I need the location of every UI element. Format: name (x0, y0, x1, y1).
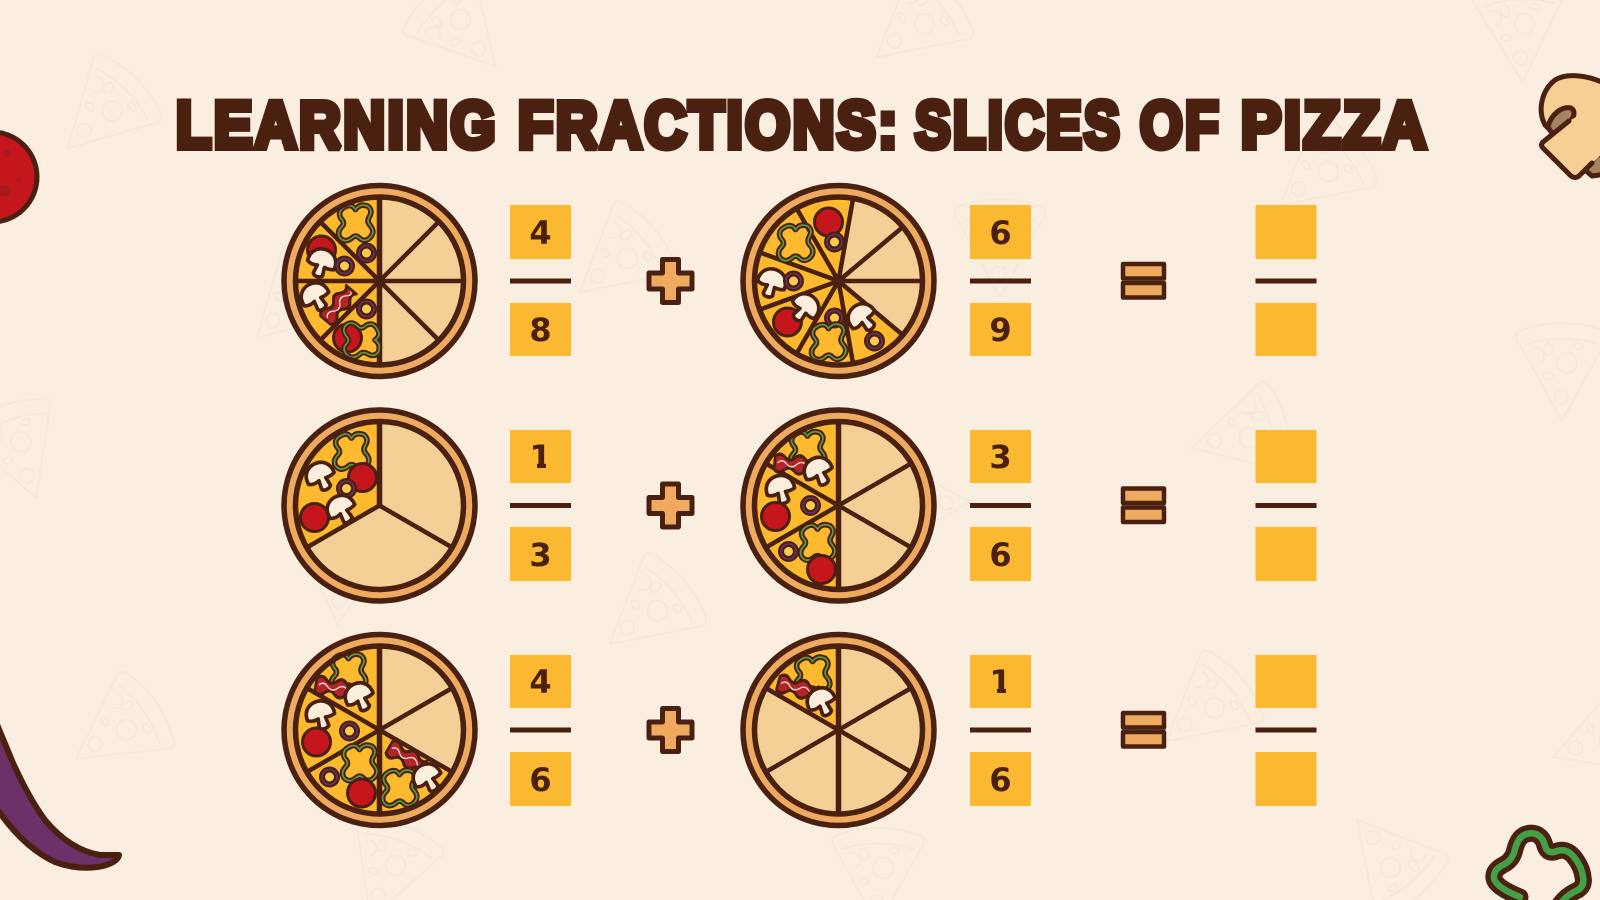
row 2: 1/3 + 3/6 = ? (284, 410, 1316, 601)
fraction 4 over 8: 4 (529, 214, 552, 252)
fraction 3 over 6 (970, 430, 1031, 581)
decoration: mushroom right edge (1541, 76, 1600, 178)
pizza: 4 of 8 slices (284, 186, 475, 376)
row 1: 4/8 + 6/9 = ? (284, 186, 1316, 376)
decoration: pepperoni left edge (0, 132, 37, 222)
fraction 1 over 3 (510, 430, 571, 581)
title: FRACTIONS: (518, 88, 900, 162)
fraction 1 over 6 (970, 655, 1031, 806)
fraction 1 over 6: 6 (989, 761, 1012, 799)
fraction 4 over 6 (510, 655, 571, 806)
fraction 1 over 3: 3 (529, 536, 552, 574)
title (176, 88, 1429, 162)
fraction 1 over 6: 1 (989, 663, 1012, 701)
title: OF (1140, 88, 1221, 162)
fraction 4 over 8: 8 (529, 311, 552, 349)
pizza: 6 of 9 slices (743, 186, 934, 376)
plus sign (649, 708, 692, 752)
equals sign (1123, 264, 1164, 298)
fraction 4 over 6: 4 (529, 663, 552, 701)
title: PIZZA (1241, 88, 1429, 162)
decoration: eggplant lower left (0, 722, 119, 868)
fraction 4 over 6: 6 (529, 761, 552, 799)
fraction 6 over 9: 9 (989, 311, 1012, 349)
equals sign (1123, 488, 1164, 522)
plus sign (649, 484, 692, 527)
empty answer fraction (1256, 205, 1316, 356)
row 3: 4/6 + 1/6 = ? (284, 634, 1316, 826)
fraction 3 over 6: 6 (989, 536, 1012, 574)
fraction 1 over 3: 1 (529, 438, 552, 476)
equals sign (1123, 713, 1164, 746)
plus sign (649, 260, 692, 302)
empty answer fraction (1256, 655, 1316, 806)
fraction 6 over 9: 6 (989, 214, 1012, 252)
fraction 6 over 9 (970, 205, 1031, 356)
pizza: 3 of 6 slices (743, 410, 934, 601)
pizza: 1 of 3 slices (284, 410, 475, 601)
title: SLICES (915, 88, 1122, 162)
fraction 3 over 6: 3 (989, 438, 1012, 476)
fraction 4 over 8 (510, 205, 571, 356)
decoration: green pepper lower right (1494, 833, 1583, 900)
pizza: 1 of 6 slices (743, 634, 934, 826)
title: LEARNING (176, 88, 498, 162)
pizza: 4 of 6 slices (284, 634, 475, 826)
empty answer fraction (1256, 430, 1316, 581)
